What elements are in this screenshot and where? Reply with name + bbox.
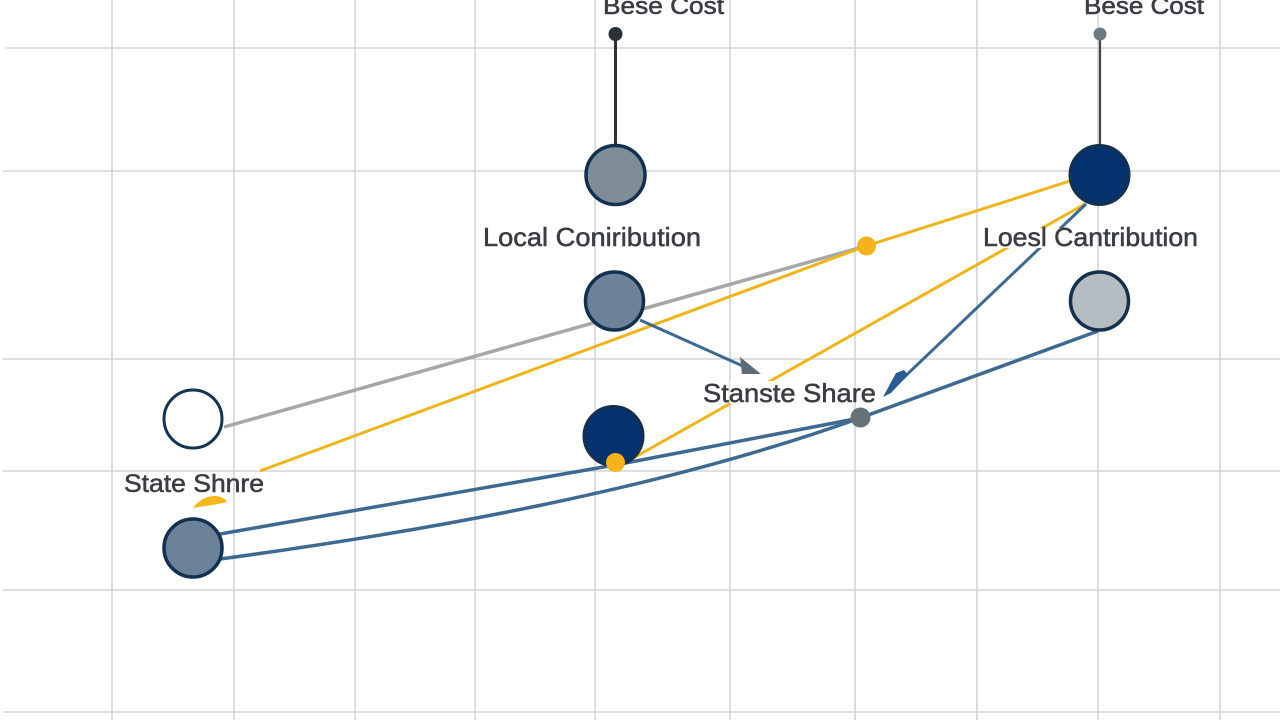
- node: slate lower left: [164, 519, 222, 577]
- node: navy lower: [584, 406, 643, 466]
- dot: gold lower: [606, 453, 625, 472]
- arrow: local contribution to stanste share: [640, 320, 761, 374]
- icon: gold arc: [193, 496, 227, 508]
- connector: gray line from white node to gold dot: [224, 246, 866, 427]
- connector: gold line from state share to navy node: [260, 181, 1070, 471]
- connector: blue line from lower left node through gray dot: [220, 331, 1098, 534]
- node: gray top: [586, 146, 645, 204]
- dot: gold upper: [857, 236, 876, 256]
- label: state share: State Shnre: [124, 470, 264, 498]
- node: light gray middle: [1070, 272, 1128, 330]
- dot: gray junction: [850, 408, 870, 428]
- label: local contribution left: Local Coniribution: [483, 222, 701, 252]
- label: local contribution right: Loesl Cantribution: [983, 222, 1198, 252]
- connector: blue curve from lower left node: [220, 418, 860, 559]
- connector: gold line from gold dot to navy node: [628, 204, 1085, 461]
- stem: right base cost: [1094, 28, 1106, 146]
- label: stanste share: Stanste Share: [703, 378, 876, 408]
- arrow: navy node to stanste share: [883, 204, 1086, 397]
- node: slate middle: [586, 272, 644, 330]
- node: white: [164, 390, 222, 448]
- stem: left base cost: [608, 27, 622, 146]
- node: navy top: [1070, 146, 1129, 204]
